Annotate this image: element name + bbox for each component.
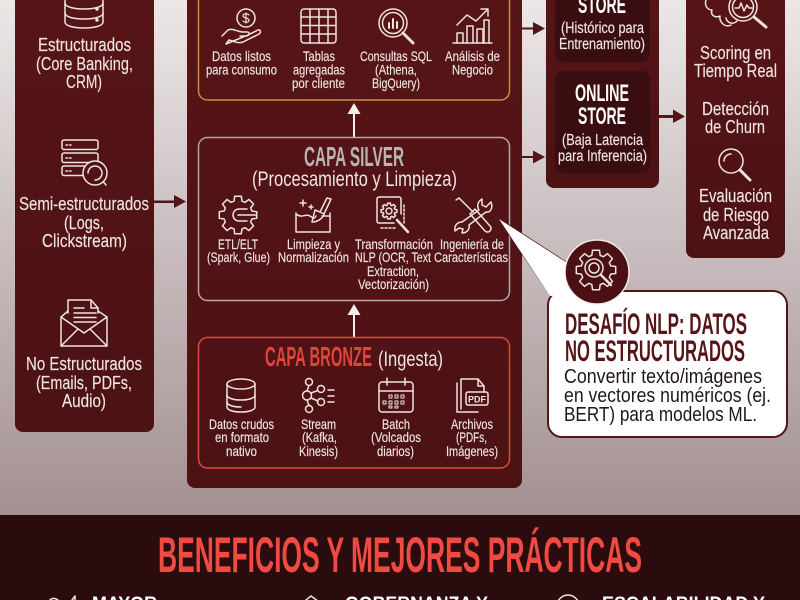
text: raw data: Datos crudos — [209, 416, 274, 432]
text: real time scoring: Tiempo Real — [694, 60, 777, 81]
text: stream: (Kafka, — [302, 429, 337, 445]
text: stream: Kinesis) — [299, 443, 338, 459]
text: churn detection — [702, 98, 769, 137]
text: churn detection: de Churn — [705, 116, 765, 137]
text: aggregated tables — [292, 48, 345, 91]
text: ready data — [206, 48, 277, 78]
text: unstructured: (Emails, PDFs, — [36, 372, 132, 393]
heading: silver: (Procesamiento y Limpieza) — [252, 168, 457, 191]
text: batch: (Volcados — [371, 429, 421, 445]
tail joint — [499, 219, 585, 296]
arrow: silver to gold — [348, 103, 360, 137]
text: ETL: ETL/ELT — [218, 236, 258, 252]
card: offline store: Entrenamiento) — [559, 36, 645, 53]
text: cleaning: Limpieza y — [287, 236, 340, 252]
text: semi-structured: (Logs, — [64, 212, 104, 233]
text: challenge body — [564, 366, 771, 426]
icon: logs server — [62, 140, 107, 185]
text: risk evaluation: de Riesgo — [703, 204, 769, 225]
text: unstructured: Audio) — [62, 390, 106, 411]
icon: email envelope — [61, 300, 107, 346]
text: SQL queries: Consultas SQL — [360, 48, 432, 64]
text: ready data: para consumo — [206, 62, 277, 78]
card: online store: para Inferencia) — [558, 148, 647, 165]
heading: silver: CAPA SILVER — [304, 141, 404, 172]
card: offline store — [555, 0, 650, 62]
icon: benefit three — [557, 595, 579, 600]
text: files — [446, 416, 498, 459]
icon: benefit two — [301, 596, 322, 600]
panel: data sources — [15, 0, 154, 432]
text: unstructured: No Estructurados — [26, 353, 142, 374]
text: real time scoring — [694, 42, 777, 81]
icon: database — [65, 0, 103, 28]
text: batch — [371, 416, 421, 459]
text: NLP transformation: Transformación — [355, 236, 433, 252]
icon: raw database — [227, 379, 255, 412]
text: challenge body: BERT) para modelos ML. — [564, 404, 757, 426]
text: semi-structured: Semi-estructurados — [19, 193, 149, 214]
text: NLP transformation: NLP (OCR, Text — [355, 249, 431, 265]
callout: NLP challenge — [498, 218, 787, 437]
card: online store: (Baja Latencia — [562, 132, 643, 149]
icon: brain scoring — [705, 0, 766, 27]
text: raw data — [209, 416, 274, 459]
text: SQL queries — [360, 48, 432, 91]
text: files: (PDFs, — [456, 429, 487, 445]
card: online store: STORE — [578, 103, 626, 130]
text: business analysis: Negocio — [452, 62, 493, 78]
arrow: gold to offline store — [521, 22, 545, 35]
arrow: online store to applications — [659, 110, 685, 123]
panel: applications — [686, 0, 785, 258]
text: batch: Batch — [382, 416, 410, 432]
text: feature engineering: Ingeniería de — [440, 236, 504, 252]
icon: benefit one — [50, 596, 75, 600]
text: ready data: Datos listos — [212, 48, 271, 64]
heading: silver — [252, 141, 457, 191]
text: semi-structured: Clickstream) — [42, 230, 127, 251]
card: online store: ONLINE — [575, 80, 629, 107]
text: business analysis: Análisis de — [445, 48, 500, 64]
text: raw data: nativo — [226, 443, 257, 459]
panel: gold layer — [198, 0, 510, 100]
text: aggregated tables: por cliente — [292, 75, 345, 91]
icon: growth chart — [453, 9, 492, 43]
arrow: sources to lakehouse — [154, 195, 186, 208]
icon: money hand — [222, 9, 260, 44]
text: stream — [299, 416, 338, 459]
text: business analysis — [445, 48, 500, 78]
icon: query magnifier — [379, 9, 413, 43]
text: NLP transformation: Extraction, — [367, 263, 419, 279]
icon: tools — [455, 198, 492, 233]
icon: ETL gear — [219, 196, 257, 234]
text: risk evaluation: Avanzada — [703, 222, 770, 243]
text: risk evaluation: Evaluación — [699, 185, 772, 206]
panel: feature store — [546, 0, 659, 188]
arrow: bronze to silver — [348, 304, 360, 337]
text: files: Archivos — [451, 416, 493, 432]
label: PDF in icon: PDF — [468, 394, 487, 404]
text: files: Imágenes) — [446, 443, 498, 459]
text: SQL queries: BigQuery) — [372, 75, 420, 91]
callout box — [548, 291, 787, 437]
text: cleaning: Normalización — [278, 249, 349, 265]
heading: challenge — [565, 307, 747, 368]
text: structured: (Core Banking, — [36, 53, 133, 74]
text: feature engineering: Características — [434, 249, 508, 265]
text: ETL: (Spark, Glue) — [207, 249, 270, 265]
text: challenge body: Convertir texto/imágenes — [564, 366, 762, 388]
card: offline store: (Histórico para — [561, 20, 644, 37]
text: structured — [36, 34, 133, 92]
heading: bronze: (Ingesta) — [378, 348, 443, 371]
heading: bronze: CAPA BRONZE — [265, 341, 372, 372]
text: cleaning — [278, 236, 349, 265]
text: ETL — [207, 236, 270, 265]
card: online store — [555, 71, 650, 173]
text: challenge body: en vectores numéricos (ej. — [564, 385, 771, 407]
icon: NLP gear badge — [565, 240, 629, 304]
text: NLP transformation — [355, 236, 433, 292]
icon: PDF files — [457, 379, 488, 412]
icon: NLP document — [377, 197, 408, 232]
text: unstructured — [26, 353, 142, 411]
text: structured: CRM) — [66, 71, 102, 92]
text: NLP transformation: Vectorización) — [358, 276, 429, 292]
text: semi-structured — [19, 193, 149, 251]
icon: magnifier — [719, 149, 750, 180]
text: stream: Stream — [301, 416, 336, 432]
text: raw data: en formato — [215, 429, 269, 445]
panel: lakehouse layers — [187, 0, 522, 488]
text: real time scoring: Scoring en — [700, 42, 771, 63]
text: risk evaluation — [699, 185, 772, 243]
icon: calendar — [379, 378, 413, 412]
icon: stream nodes — [302, 378, 334, 412]
callout tail — [498, 218, 572, 300]
text: aggregated tables: Tablas — [303, 48, 335, 64]
text: SQL queries: (Athena, — [375, 62, 417, 78]
panel: silver layer — [198, 138, 510, 300]
panel: benefits footer — [0, 515, 800, 600]
text: batch: diarios) — [377, 443, 414, 459]
text: aggregated tables: agregadas — [293, 62, 345, 78]
panel: bronze layer — [198, 338, 510, 468]
arrow: silver to online store — [521, 150, 545, 164]
text: feature engineering — [434, 236, 508, 265]
icon: table — [301, 9, 336, 43]
text: structured: Estructurados — [38, 34, 131, 55]
icon: cleaning brush — [296, 198, 331, 232]
text: churn detection: Detección — [702, 98, 769, 119]
